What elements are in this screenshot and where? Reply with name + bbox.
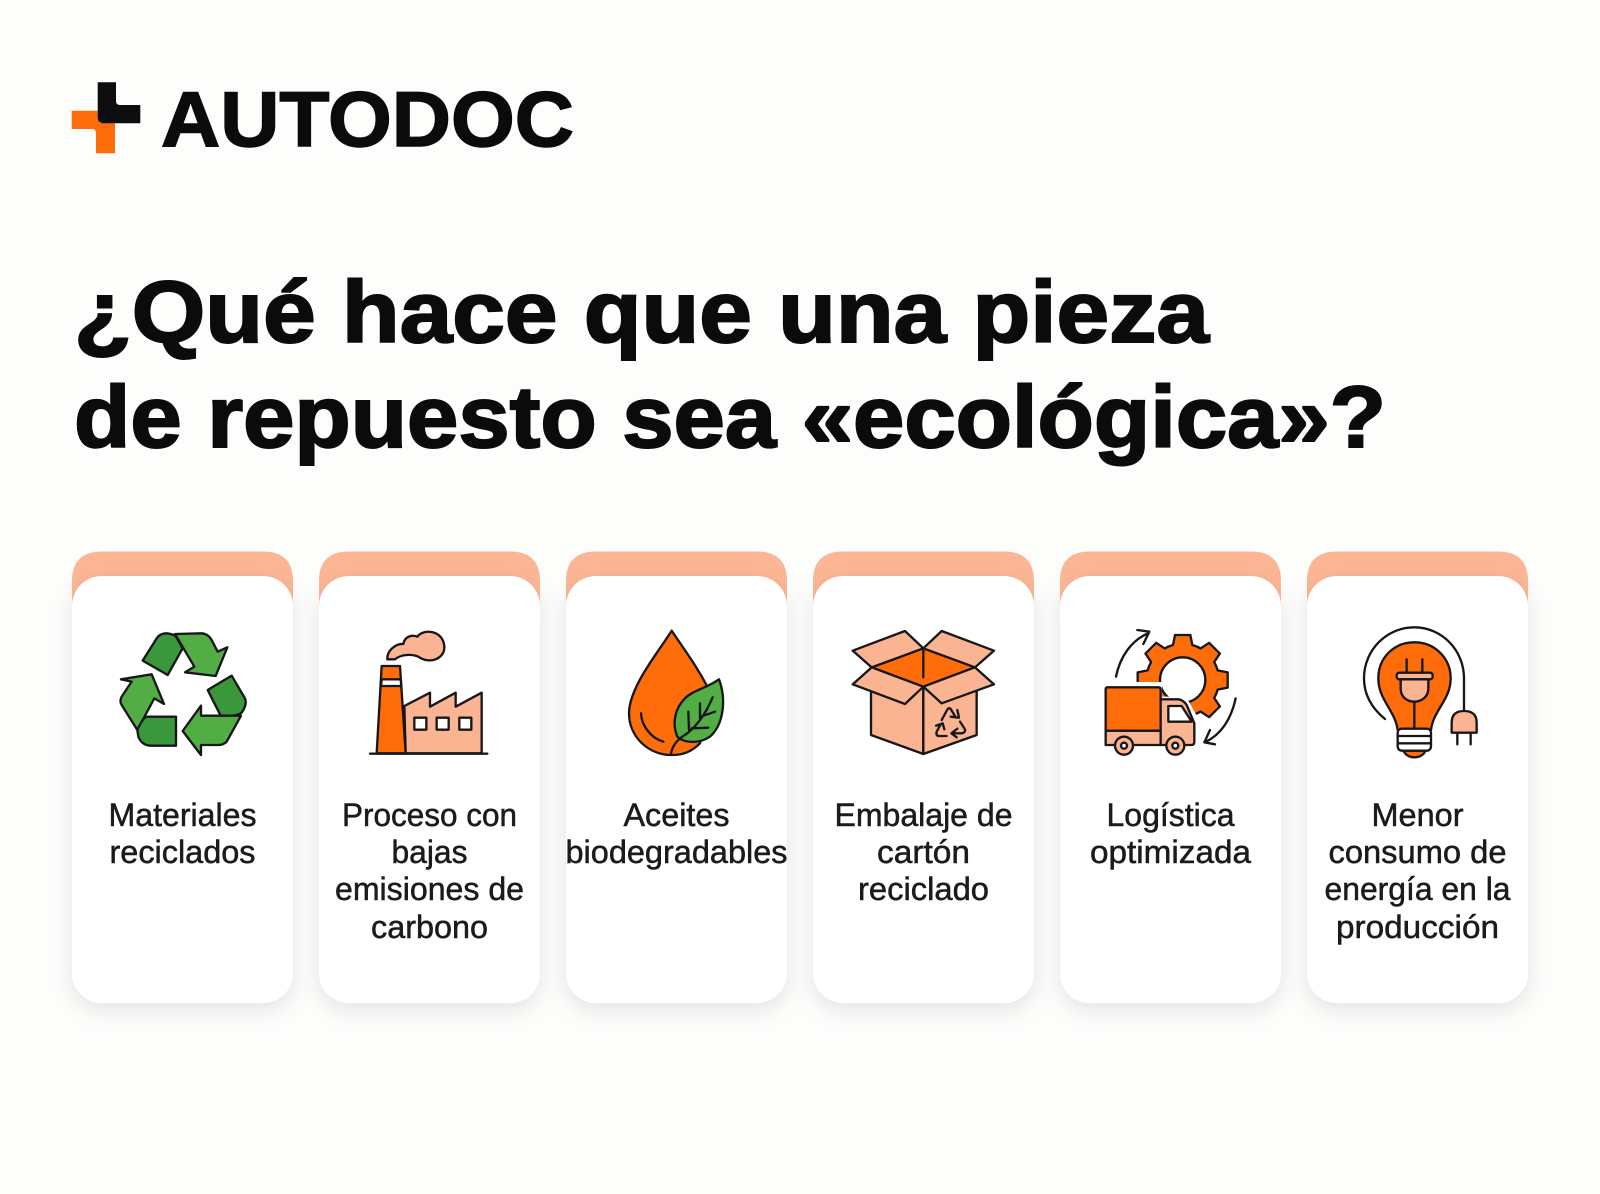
label [834,797,1012,907]
label: reciclado [858,871,989,907]
logo wordmark: AUTODOC [161,75,574,163]
title: de repuesto sea «ecológica»? [74,369,1386,466]
panel: materiales reciclados [72,552,293,1003]
logo: AUTODOC [72,75,574,163]
label: Proceso con [342,797,517,833]
title: ¿Qué hace que una pieza [74,264,1210,361]
label: cartón [877,834,970,870]
label: biodegradables [566,834,788,870]
label: optimizada [1090,834,1251,870]
label [108,797,256,870]
icon: logo cross [72,82,140,153]
label: producción [1336,909,1499,945]
label: energía en la [1324,871,1511,907]
panel: menor consumo de energía [1307,552,1528,1003]
label: Materiales [108,797,256,833]
panel: aceites biodegradables [566,552,788,1003]
icon: open cardboard box [853,631,994,754]
icon: oil drop with leaf [629,631,723,755]
label: Logística [1106,797,1235,833]
label [1090,797,1251,870]
label: Aceites [624,797,730,833]
label [1324,797,1511,945]
panel: embalaje de cartón reciclado [813,552,1034,1003]
label [566,797,788,870]
label: emisiones de [335,871,524,907]
label: Embalaje de [834,797,1012,833]
panel: proceso con bajas emisiones [319,552,540,1003]
label [335,797,524,945]
label: reciclados [110,834,256,870]
icon: factory [370,632,487,754]
icon: recycling arrows [120,633,246,755]
icon: truck and gear [1100,630,1236,755]
label: bajas [392,834,468,870]
label: consumo de [1328,834,1506,870]
panel: logística optimizada [1060,552,1281,1003]
label: carbono [371,909,488,945]
title [74,264,1386,466]
icon: light bulb with plug [1364,627,1477,757]
label: Menor [1372,797,1464,833]
